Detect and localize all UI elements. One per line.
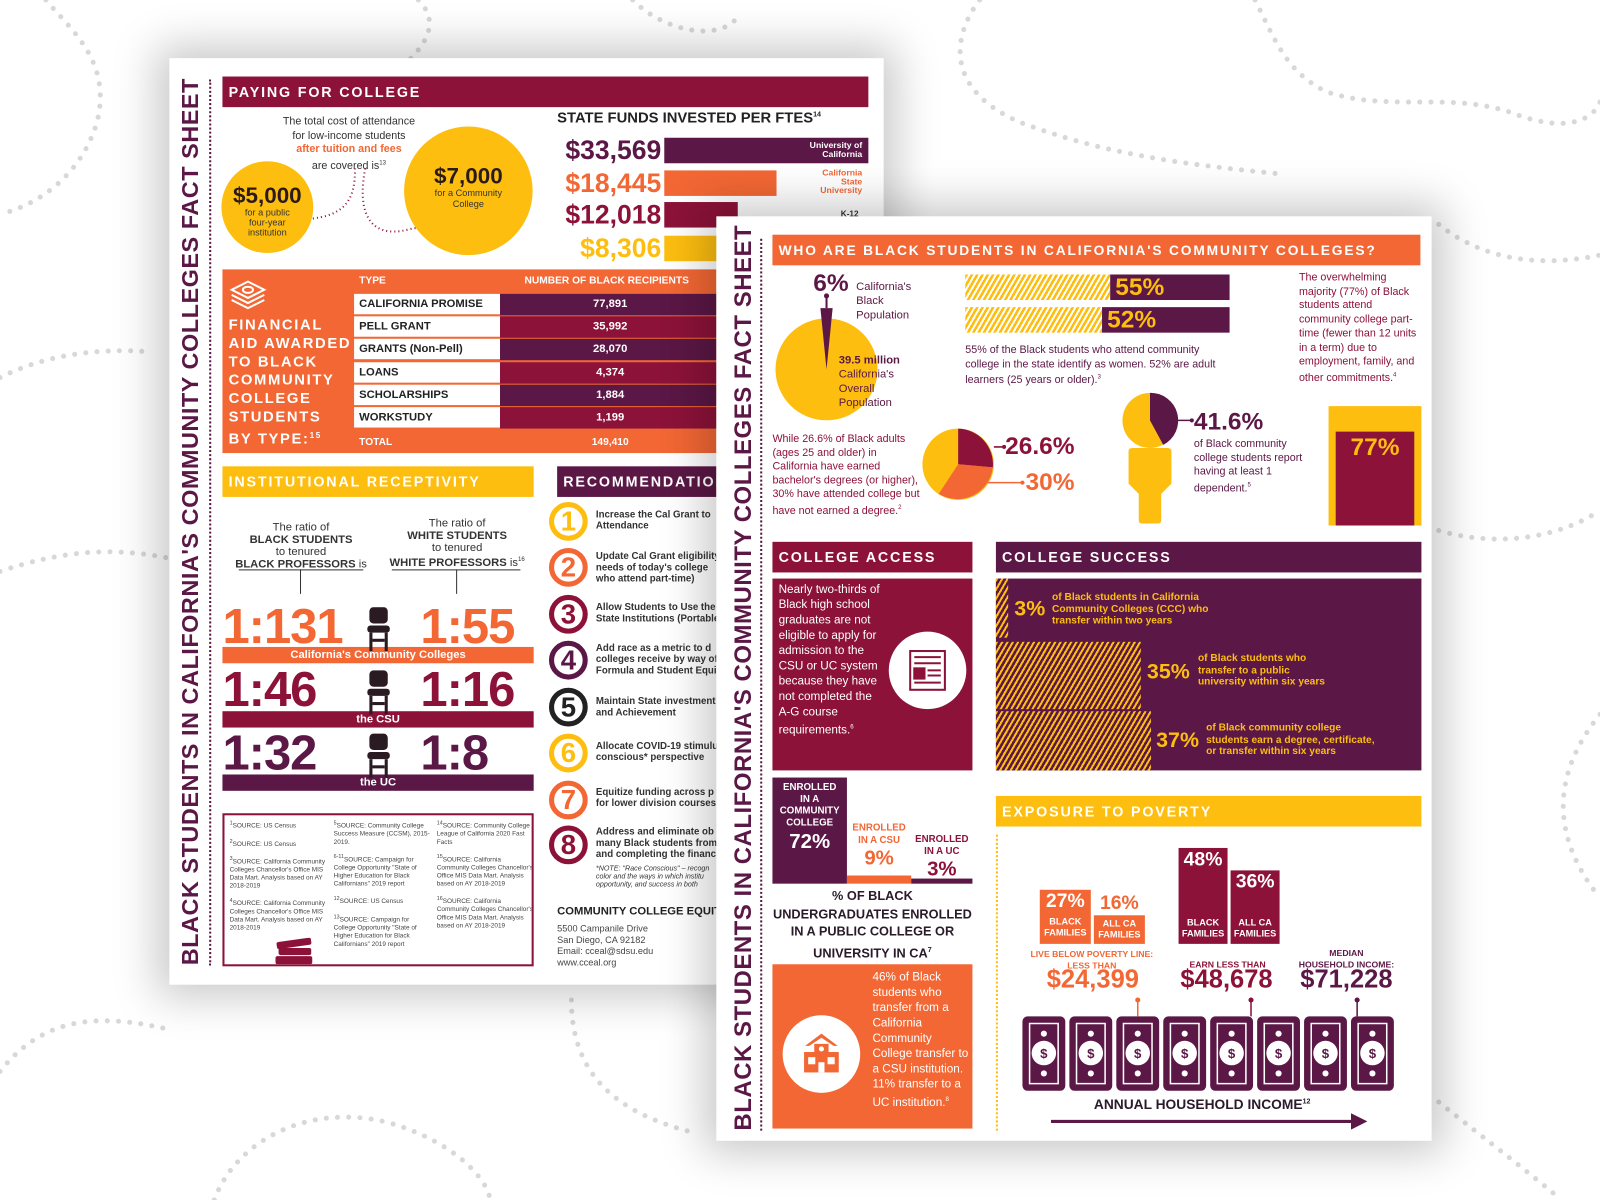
text: for lower division courses <box>596 798 716 809</box>
panel: financial aid table: TO BLACK <box>229 354 318 370</box>
text: Update Cal Grant eligibility <box>596 551 716 562</box>
chart: enrollment: 3% <box>927 858 957 881</box>
chart: enrollment: IN A PUBLIC COLLEGE OR <box>791 924 954 939</box>
text: opportunity, and success in both <box>596 882 698 889</box>
box: 77%: 77% <box>1350 434 1399 461</box>
ratio labels <box>235 521 367 570</box>
header: exposure to poverty: EXPOSURE TO POVERTY <box>1002 803 1212 819</box>
text block: cost of attendance: for low-income students <box>292 129 406 141</box>
ratio labels: BLACK STUDENTS <box>250 534 352 546</box>
footer: contact: Email: cceal@sdsu.edu <box>557 946 653 956</box>
circle: $5,000: four-year <box>249 217 286 228</box>
panel: sources: 13SOURCE: Campaign for College Opportunity "State of Higher Education for Black Californians" 2019 report <box>334 914 417 947</box>
text: GRANTS (Non-Pell) <box>359 343 463 355</box>
chart: poverty bars: BLACK <box>1049 916 1081 927</box>
panel: financial aid table: COMMUNITY <box>229 372 334 389</box>
chart: enrollment: 9% <box>864 847 894 869</box>
state funds chart: $12,018 <box>565 199 661 230</box>
chart: poverty bars: 27% <box>1046 891 1085 912</box>
chart: poverty bars <box>1030 848 1394 994</box>
text: part-time 77%: The overwhelming majority (77%) of Black students attend community college part-time (fewer than 12 units in a term) due to employment, family, and other commitments.4 <box>1299 271 1416 384</box>
right page <box>716 216 1432 1141</box>
chart: enrollment <box>772 778 972 960</box>
chart: poverty bars: FAMILIES <box>1234 929 1276 939</box>
circle: $7,000: $7,000 <box>434 163 503 189</box>
text: who attend part-time) <box>596 573 694 585</box>
text: colleges receive by way of <box>596 654 716 665</box>
state funds chart: $8,306 <box>580 233 661 263</box>
text block: cost of attendance <box>283 115 415 171</box>
footer: contact: San Diego, CA 92182 <box>557 935 645 945</box>
pie: 6% black population: 39.5 million <box>839 354 900 366</box>
state funds chart: K-12 <box>841 209 859 218</box>
text: 1:55 <box>420 600 514 654</box>
recommendations list <box>549 502 588 864</box>
panel: college success: 37% <box>1156 729 1199 752</box>
text block: cost of attendance: after tuition and fees <box>296 143 402 155</box>
chart: poverty bars: ALL CA <box>1238 917 1272 928</box>
chart: poverty bars: $71,228 <box>1300 965 1393 994</box>
header: college access <box>772 542 972 572</box>
circle: $7,000: for a Community <box>435 188 502 198</box>
text: 1:46 <box>222 663 316 717</box>
chart: poverty bars: $24,399 <box>1047 965 1139 994</box>
chart: enrollment: ENROLLED <box>783 782 836 793</box>
text: and Achievement <box>596 707 676 718</box>
panel: college success: transfer to a public <box>1198 665 1290 676</box>
text block: cost of attendance: are covered is13 <box>312 159 386 171</box>
text: The ratio of <box>429 517 486 530</box>
text: degrees: While 26.6% of Black adults (ages 25 and older) in California have earned bachelor's degrees (or higher), 30% have attended college but have not earned a degree.2 <box>772 433 920 517</box>
recommendations list: 1 <box>561 506 576 536</box>
icon: books <box>275 938 312 964</box>
panel: financial aid table: NUMBER OF BLACK RECIPIENTS <box>524 276 689 287</box>
header: college success: COLLEGE SUCCESS <box>1002 549 1172 565</box>
header: exposure to poverty <box>996 796 1421 827</box>
recommendations list: 6 <box>561 737 576 768</box>
chart: enrollment: IN A <box>800 793 819 805</box>
text: 4,374 <box>596 366 624 379</box>
panel: sources <box>222 813 534 966</box>
hatched bars: 55% / 52%: 52% <box>1107 306 1156 334</box>
chart: enrollment: % OF BLACK <box>832 889 913 903</box>
ratio labels: The ratio of <box>273 521 329 534</box>
text: California's Community Colleges <box>290 649 466 661</box>
icon: person with 41.6%: 41.6% <box>1194 408 1263 436</box>
dotted connectors <box>312 168 416 233</box>
pie: 6% black population: 6% <box>813 269 849 297</box>
header: recommendations <box>557 466 716 497</box>
panel: college success: transfer within two years <box>1052 615 1172 627</box>
text: 1,199 <box>596 411 624 423</box>
panel: sources: 5SOURCE: Community College Success Measure (CCSM), 2015-2019. <box>334 820 430 846</box>
recommendations list: 5 <box>561 691 576 722</box>
panel: sources: 2SOURCE: US Census <box>230 838 296 848</box>
pie: degrees: 30% <box>1026 468 1075 496</box>
label: annual household income: ANNUAL HOUSEHOLD INCOME12 <box>1094 1097 1311 1112</box>
panel: college success: students earn a degree, certificate, <box>1206 734 1375 745</box>
text: 1:32 <box>222 727 316 781</box>
text block: cost of attendance: The total cost of attendance <box>283 115 415 128</box>
text: the CSU <box>356 713 400 726</box>
box: 77% <box>1329 406 1421 526</box>
panel: financial aid table <box>222 269 716 453</box>
table rows <box>354 294 716 316</box>
text: color and the ways in which institu <box>596 873 704 881</box>
chart: poverty bars: FAMILIES <box>1098 930 1141 940</box>
chart: poverty bars: FAMILIES <box>1044 928 1086 938</box>
header: paying for college <box>222 77 868 107</box>
panel: sources: 15SOURCE: California Community Colleges Chancellor's Office MIS Data Mart. Analysis based on AY 2018-2019 <box>437 854 533 888</box>
pie: 6% black population: California's <box>856 281 911 293</box>
text: 1:8 <box>420 727 488 781</box>
table rows: CALIFORNIA PROMISE <box>359 298 483 310</box>
pie: degrees: 26.6% <box>1005 433 1075 460</box>
text: State Institutions (Portable <box>596 613 716 624</box>
state funds chart: California <box>822 149 862 159</box>
panel: college success: Community Colleges (CCC) who <box>1052 604 1209 615</box>
pie: 6% black population: California's <box>839 368 894 381</box>
text: *NOTE: "Race Conscious" – recogn <box>596 865 709 872</box>
chart: poverty bars: LESS THAN <box>1067 960 1116 970</box>
panel: financial aid table: AID AWARDED <box>229 336 351 352</box>
panel: financial aid table: TYPE <box>359 276 386 287</box>
text: Add race as a metric to d <box>596 643 711 654</box>
panel: sources: 6-11SOURCE: Campaign for College Opportunity "State of Higher Education for Black Californians" 2019 report <box>334 854 417 888</box>
hatched bars: 55% / 52% <box>965 273 1230 386</box>
state funds chart: California <box>822 167 862 178</box>
text: SCHOLARSHIPS <box>359 389 448 401</box>
pie: 6% black population: Overall <box>839 383 874 395</box>
panel: financial aid table: COLLEGE <box>229 391 312 407</box>
text: conscious* perspective <box>596 752 704 763</box>
text: Allow Students to Use the <box>596 602 715 613</box>
pie: 6% black population: Black <box>856 295 884 307</box>
chart: poverty bars: $48,678 <box>1180 965 1273 994</box>
panel: financial aid table: FINANCIAL <box>229 317 323 334</box>
panel: college success: 35% <box>1147 660 1190 684</box>
panel: college success: university within six years <box>1198 677 1325 688</box>
text: Address and eliminate ob <box>596 827 714 838</box>
chart: enrollment: IN A CSU <box>858 834 900 845</box>
panel: financial aid table: BY TYPE:15 <box>229 431 322 448</box>
panel: college success: of Black students who <box>1198 653 1306 664</box>
state funds chart: $18,445 <box>565 167 661 198</box>
chart: enrollment: ENROLLED <box>852 822 906 834</box>
panel: sources: 1SOURCE: US Census <box>230 820 296 830</box>
state funds chart: State <box>841 176 862 186</box>
text: Equitize funding across p <box>596 787 714 798</box>
text: 1:16 <box>420 663 514 717</box>
icon: money stack <box>230 280 266 310</box>
recommendations list: 4 <box>561 644 576 675</box>
chart: enrollment: COMMUNITY <box>780 805 840 816</box>
panel: sources: 14SOURCE: Community College League of California 2020 Fast Facts <box>437 820 530 846</box>
recommendations list: 2 <box>561 552 576 582</box>
chart: enrollment: UNIVERSITY IN CA7 <box>813 946 932 960</box>
panel: college access: Nearly two-thirds of Black high school graduates are not eligible to apply for admission to the CSU or UC system because they have not completed the A-G course requirements.6 <box>779 584 880 737</box>
icon: person with 41.6%: of Black community college students report having at least 1 dependent.5 <box>1194 438 1302 494</box>
state funds chart: University of <box>810 140 862 150</box>
panel: college success: 3% <box>1014 597 1045 620</box>
panel: financial aid table: STUDENTS <box>229 409 321 426</box>
text: many Black students from <box>596 838 716 849</box>
table rows: 77,891 <box>593 298 627 310</box>
panel: college success: of Black students in California <box>1052 592 1199 603</box>
circle: $5,000: $5,000 <box>233 183 302 208</box>
header: college success <box>996 542 1421 572</box>
text: LOANS <box>359 366 398 379</box>
icon: document <box>889 632 966 709</box>
panel: college success <box>996 579 1421 770</box>
text: to tenured <box>432 542 482 554</box>
ratio labels: to tenured <box>276 546 326 558</box>
hatched bars: 55% / 52%: 55% of the Black students who attend community college in the state identify as women. 52% are adult learners (25 years or older).3 <box>965 344 1215 386</box>
chart: poverty bars: LIVE BELOW POVERTY LINE: <box>1030 949 1153 959</box>
recommendations list: 3 <box>561 598 576 629</box>
hatched bars: 55% / 52%: 55% <box>1115 273 1164 301</box>
header: institutional receptivity: INSTITUTIONAL RECEPTIVITY <box>229 473 481 490</box>
icons: money bills <box>1022 998 1394 1091</box>
ratios: 1:131 <box>222 600 343 654</box>
chart: poverty bars: EARN LESS THAN <box>1189 959 1266 969</box>
text: 28,070 <box>593 343 627 355</box>
panel: sources: 16SOURCE: California Community Colleges Chancellor's Office MIS Data Mart. Analysis based on AY 2018-2019 <box>437 896 533 929</box>
icon: school building <box>783 1015 860 1093</box>
circle: $5,000: institution <box>248 228 287 238</box>
circle: $5,000: for a public <box>245 207 290 217</box>
icon: chairs <box>367 607 390 778</box>
circle: $7,000 <box>404 127 533 255</box>
chart: poverty bars: HOUSEHOLD INCOME: <box>1299 959 1394 969</box>
circle: $7,000: College <box>453 199 484 209</box>
recommendations list: 8 <box>561 829 576 860</box>
arrow <box>1051 1113 1368 1130</box>
left vertical title: BLACK STUDENTS IN CALIFORNIA'S COMMUNITY COLLEGES FACT SHEET <box>177 78 203 965</box>
footer: contact: 5500 Campanile Drive <box>557 923 648 934</box>
panel: college success: or transfer within six years <box>1206 746 1336 757</box>
state funds chart: STATE FUNDS INVESTED PER FTES14 <box>557 110 821 127</box>
text: WORKSTUDY <box>359 411 433 423</box>
state funds chart: University <box>820 185 862 195</box>
footer: contact: www.cceal.org <box>557 957 616 967</box>
header: who are black students <box>772 235 1420 265</box>
state funds chart <box>557 110 868 263</box>
chart: poverty bars: 16% <box>1100 893 1139 914</box>
chart: enrollment: UNDERGRADUATES ENROLLED <box>773 907 972 921</box>
header: who are black students: WHO ARE BLACK STUDENTS IN CALIFORNIA'S COMMUNITY COLLEGES? <box>779 242 1377 258</box>
text: PELL GRANT <box>359 320 431 333</box>
ratio labels: BLACK PROFESSORS is <box>235 558 367 570</box>
panel: financial aid table: TOTAL <box>359 437 392 448</box>
pie: 6% black population: Population <box>839 397 892 409</box>
chart: poverty bars: 36% <box>1236 871 1274 893</box>
panel: sources: 3SOURCE: California Community Colleges Chancellor's Office MIS Data Mart. Analysis based on AY 2018-2019 <box>230 856 325 890</box>
footer: contact <box>557 905 716 968</box>
pie: degrees <box>922 428 1075 500</box>
circle: $5,000 <box>221 161 313 253</box>
pie: 6% black population: Population <box>856 309 909 321</box>
panel: sources: 12SOURCE: US Census <box>334 896 403 906</box>
chart: poverty bars: FAMILIES <box>1182 929 1224 939</box>
chart: poverty bars: MEDIAN <box>1329 948 1364 958</box>
chart: poverty bars: ALL CA <box>1103 918 1136 929</box>
text: Maintain State investment <box>596 696 716 707</box>
text: Increase the Cal Grant to <box>596 509 711 520</box>
icon: person with 41.6% <box>1122 392 1302 524</box>
text: Attendance <box>596 520 649 532</box>
chart: enrollment: ENROLLED <box>915 834 968 845</box>
recommendations list: 7 <box>561 784 576 815</box>
right vertical title: BLACK STUDENTS IN CALIFORNIA'S COMMUNITY COLLEGES FACT SHEET <box>730 225 756 1131</box>
text: WHITE PROFESSORS is16 <box>389 557 525 569</box>
header: institutional receptivity <box>222 466 534 497</box>
pie: 6% black population <box>776 269 911 420</box>
panel: college access <box>772 579 972 770</box>
panel: sources: 4SOURCE: California Community Colleges Chancellor's Office MIS Data Mart. Analysis based on AY 2018-2019 <box>230 898 325 932</box>
chart: poverty bars: 48% <box>1184 849 1222 870</box>
panel: financial aid table: 149,410 <box>592 437 629 448</box>
header: paying for college: PAYING FOR COLLEGE <box>229 84 421 100</box>
chart: enrollment: COLLEGE <box>786 817 833 828</box>
chart: poverty bars: BLACK <box>1187 917 1219 928</box>
text: needs of today's college <box>596 562 708 573</box>
chart: enrollment: 72% <box>789 831 830 853</box>
chart: enrollment: IN A UC <box>924 845 960 857</box>
panel: transfer <box>772 964 972 1129</box>
state funds chart: $33,569 <box>565 135 661 165</box>
left page <box>169 58 884 985</box>
panel: college success: of Black community college <box>1206 722 1341 734</box>
panel: transfer: 46% of Black students who transfer from a California Community College transfer to a CSU institution. 11% transfer to a UC institution.8 <box>872 971 968 1109</box>
header: college access: COLLEGE ACCESS <box>779 549 936 565</box>
text: WHITE STUDENTS <box>407 530 507 542</box>
text: the UC <box>360 777 396 789</box>
text: 35,992 <box>593 320 627 333</box>
text: 1,884 <box>596 389 624 401</box>
